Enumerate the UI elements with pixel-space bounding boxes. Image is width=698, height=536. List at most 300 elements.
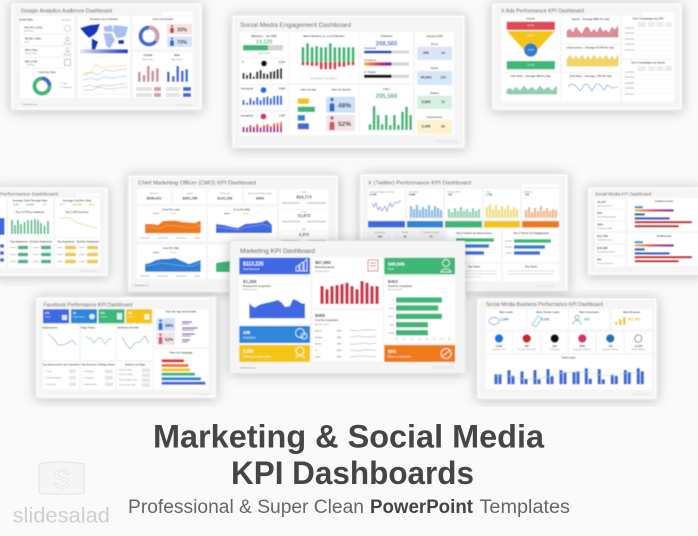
panel: top countries: Top Impressions by Countries [42,362,80,366]
panel: monthly metrics: Conversions [427,115,443,119]
panel: X followers [240,58,288,84]
panel: left KPI list: Total Social Fans [597,204,612,208]
panel: click rate line chart [562,73,620,102]
panel: Facebook followers: Facebook [241,86,254,90]
panel: top campaigns by spend table [622,60,674,102]
panel: average click-through rate chart: 6.7 [43,204,47,206]
panel: new vs lost followers chart: New Followers vs. Lost Followers [303,34,345,38]
dashboard card: Social Media Engagement [232,15,465,148]
panel: page views line chart: Page Views [81,326,96,330]
panel: total revenue tile [239,258,310,274]
panel: left KPI list: 8% [597,258,602,262]
panel: link clicks: Link Clicks [409,192,419,194]
panel: X followers: X [242,60,244,64]
panel: social network tiles: 920 [553,344,557,348]
dashboard card: Chief Marketing Officer (CMO) KPI: Chief Marketing Officer (CMO) KPI Dashboard [138,180,256,186]
panel: webinars: Webinars – Jan 2030 [251,34,277,38]
panel: social network tiles: $580 [579,344,586,348]
panel: cost per acquisition list: Social [315,344,321,346]
panel: KPI tiles: 264 [100,311,105,315]
panel: left KPI list: 848 [597,211,602,215]
panel: cost per acquisition list: $012 [337,330,342,332]
panel: funnel metrics: 2,372 [299,232,310,237]
panel: profit per acquisition bars: By week of year [388,289,403,291]
panel: likes by age and gender [289,85,359,135]
panel: click rate line chart: Click Rate – Average 1.2% Per Day [569,74,612,78]
panel: social network tiles [486,332,652,353]
panel: impressions area chart: Impressions – Average 37,879 Per Day [567,46,615,50]
panel: top tweet notes: Top Tweet [468,264,480,268]
panel: profit per acquisition bars: Social [389,308,395,310]
panel: social network tiles: 139 [608,344,613,348]
panel: fans by age and gender: Fans By Age and Gender [166,310,196,314]
panel: top KPI tiles [486,309,652,329]
panel: actions on page: Get Direction Click [119,384,136,386]
panel: fans by language bars [154,349,208,389]
panel: revenue per acquisition chart: $1,256 [243,279,257,284]
panel: social network tiles: X Followers [549,349,560,351]
panel: profit tile: $45,609 [388,262,405,266]
panel: cost per lead chart: Cost Per Lead [162,208,180,212]
panel: top and bottom segments: Top Segments [10,240,28,244]
panel: KPI tiles: Likes [128,316,134,318]
panel: top KPI tiles: $141,296 [218,196,232,200]
panel: return on investment tile: Return on Investment [388,356,411,358]
panel: cost per acquisition list [312,310,383,361]
panel: actions on page: Post Link Clicks [119,373,133,376]
panel: funnel metrics: MQL [302,229,307,231]
panel: funnel metrics: Leads [301,212,307,214]
panel: likes by age and gender: Likes by Age [300,88,317,92]
panel: top and bottom segments [0,238,100,268]
panel: goals data: 905 (+7%) [25,60,37,64]
panel: likes chart: 295,568 [376,94,398,100]
panel: top KPI tiles: New Revenue [623,310,641,314]
panel: webinars [240,32,288,57]
panel: impression rate: 2.19% [369,192,377,196]
panel: sessions map and line chart: Sessions by Continent [90,17,118,21]
panel: cost per MQL chart: Cost Per MQL [233,208,251,212]
panel: funnel: 67,104 [527,64,535,66]
dashboard card: Facebook Performance KPI: slidesalad [192,391,210,396]
panel: social network tiles: 393 [525,344,529,348]
panel: small KPI tiles: Impressions [375,232,385,234]
panel: KPI tiles: 98 [73,311,76,315]
panel: users by type donut [20,69,74,98]
panel: monthly metrics: 11 [441,100,445,104]
dashboard card: Social Media KPI: Social Media KPI Dashboard [595,191,651,196]
panel: social network tiles: 14,330 [634,344,643,348]
panel: small KPI tiles: Followers Gained [423,232,439,234]
panel: top 3 tweets by engagement [503,229,559,262]
panel: top sources: Top Sources of Page Views [81,362,115,366]
panel: acquisitions tile: 108 [243,330,251,335]
dashboard card: Chief Marketing Officer (CMO) KPI [128,175,338,292]
panel: top sources: 1. Facebook [83,371,94,373]
panel: top KPI tiles: Net Income Per Acquisition [248,192,272,195]
panel: top KPI tiles [137,189,277,204]
panel: cost per acquisition list: Display [315,337,323,339]
panel: link clicks: 5,889 [409,192,416,196]
panel: monthly metrics: 9,565 [422,100,430,104]
panel: link clicks [407,189,443,228]
dashboard card: Google Analytics Audience: 1 SlideSalad.com [22,104,38,106]
panel: retweets [522,189,559,228]
panel: impression rate: Average Engagement Rate [370,190,395,194]
panel: followers: Instagram [364,58,377,62]
panel: KPI tiles: 822 [128,311,133,315]
panel: monthly metrics: Clicks [431,66,439,70]
panel: top KPI tiles: 930 [584,318,590,322]
panel: followers: Facebook [364,46,377,50]
panel: KPI tiles: Page Views [73,316,85,318]
panel: monthly metrics: 9,450 [422,124,430,128]
panel: new vs lost followers chart [289,32,359,83]
panel: return on investment tile: 58% [388,349,397,354]
panel: social network tiles: LinkedIn Followers [602,349,619,351]
panel: top KPI tiles: Revenue [150,193,159,195]
panel: top countries: 3. Germany [45,384,55,386]
panel: cost per acquisition list: $012 [337,350,342,352]
panel: likes: Likes [486,192,491,194]
panel: top KPI tiles: $391,296 [182,196,198,200]
panel: funnel metrics: 21,972 [298,213,311,218]
panel: users by type donut: Users by Type [38,70,56,74]
panel: left KPI list: Frequency Traffic [597,228,612,230]
panel: top sources: 3. Administrator [83,383,97,386]
panel: actions on page: Actions on Page [125,362,146,366]
panel: monthly metrics: 26 [441,124,445,128]
panel: audience growth line chart [117,325,153,360]
dashboard card: X Ads Performance [492,3,682,110]
dashboard card: Google Analytics Audience: Google Analytics Audience Dashboard [21,8,112,14]
panel: top KPI tiles: New Customers [579,310,600,314]
panel: impressions area chart [562,45,620,72]
dashboard card: Performance Dashboard (cropped at left edge) [0,187,108,276]
panel: top KPI tiles: 2,999 [500,318,509,322]
panel: funnel metrics [279,189,328,252]
dashboard thumbnails [0,3,698,399]
logo: slidesalad [12,462,110,528]
panel: top KPI tiles: Sales Ready Leads [536,310,560,314]
panel: followers: 208,565 [376,42,398,48]
panel: actions on page: Number Clicks [119,370,132,372]
panel: average click-through rate chart: 6.4% [13,204,20,206]
subtitle: PowerPoint [370,497,474,518]
panel: Instagram followers: Instagram [241,114,254,118]
panel: KPI tiles: Shares [100,316,108,318]
panel: KPI tiles: Clicks [45,316,52,318]
panel: marketing qualified leads tile [239,345,310,362]
panel: total revenue tile: $113,225 [243,262,264,268]
panel: left KPI list: Social Media Referral [597,216,617,218]
panel: funnel metrics: Leads [301,192,307,194]
dashboard card: X (Twitter) Performance KPI: X (Twitter) Performance KPI Dashboard [368,180,471,186]
panel: actions on page [117,362,153,389]
main title: KPI Dashboards [231,455,474,491]
panel: impressions line chart: Impressions [42,326,58,330]
panel: goals data: Bounce Rate [25,52,38,55]
panel: social network tiles: YouTube Subscribers [517,349,536,351]
panel: fans by age and gender: 52% [165,337,174,342]
panel: monthly metrics: 45,563 [420,76,432,80]
panel: left KPI list: $18,982 [597,246,608,250]
logo: slidesalad: slidesalad [12,504,110,528]
panel: profit per acquisition bars: Tv [392,300,394,302]
panel: top KPI tiles: $57,965 [628,318,640,322]
panel: likes chart [360,85,413,135]
panel: spend chart (cropped) [0,198,6,237]
dashboard card: Marketing KPI (front) [230,241,465,373]
panel: gender bar charts [133,52,193,98]
panel: left KPI list: $12,789 [597,234,608,238]
dashboard card: Chief Marketing Officer (CMO) KPI: 1 SlideSalad.com [133,285,149,287]
panel: top and bottom segments: Bottom Segments [77,240,100,244]
panel: likes by age and gender: 52% [338,121,351,128]
panel: left KPI list: Social Media Spend [597,252,615,254]
panel: hashtag clicks [445,189,482,228]
panel: marketing qualified leads tile: Marketing Qualified Leads [243,356,272,358]
panel: top 3 tweets by impressions [447,229,501,262]
panel: funnel metrics: 924,773 [296,194,312,200]
panel: top KPI tiles: Margin [187,193,193,195]
dashboard card: Google Analytics Audience [11,3,202,110]
panel: top KPI tiles: 5,345 [541,318,550,322]
panel: goals data: Users [24,42,30,44]
panel: social network tiles: Instagram Followers [573,348,591,351]
panel: top KPI tiles: New Leads [499,310,513,314]
panel: average click-through rate chart: Average Click-Through Rate [13,198,48,202]
subtitle [128,497,570,518]
logo: slidesalad: S [53,464,70,494]
panel: cost per acquisition list: Search [315,330,322,332]
panel: profit per acquisition bars [384,277,455,343]
panel: users by gender: 30% [177,28,188,34]
dashboard card: Marketing KPI (front): slidesalad [432,365,454,371]
panel: new vs lost followers chart: New Followers Lost Followers [311,77,337,80]
panel: small KPI tiles: 39 [404,234,407,238]
panel: top KPI tiles: Net Income [220,192,231,195]
panel: goals data: 805 (+4%) [25,48,37,52]
panel: revenue per acquisition chart: By week of year [243,289,258,291]
main title: Marketing & Social Media [153,418,544,454]
panel: funnel [502,16,560,72]
panel: social network tiles: Facebook Likes [492,349,506,351]
panel: small KPI tiles [368,230,444,239]
panel: top KPI tiles: $403 [256,196,264,200]
panel: actions on page: Phone Number Click [119,380,137,382]
dashboard card: Social Media Business Performance KPI: Social Media Business Performance KPI Dashboard [486,302,603,308]
dashboard card: Social Media Engagement: slidesalad [436,139,458,145]
panel: KPI tiles [43,309,152,323]
panel: users by gender [133,16,193,49]
subtitle: Templates [480,497,570,518]
panel: top tweet notes: Top Tweet [525,264,537,268]
panel: hashtag clicks: Hashtag Clicks [447,190,460,194]
panel: total leads bar chart [486,355,652,389]
panel: followers: Followers [380,34,393,38]
dashboard card: Google Analytics Audience: slidesalad [175,102,193,107]
panel: likes: 1,793 [486,192,493,196]
panel: users by type donut: New [63,83,68,85]
panel: audience growth line chart: Audience Growth [117,326,139,330]
panel: fans by age and gender: 48% [165,323,174,328]
panel: top campaigns by CPA table: Top 5 Campaigns by CPA [632,16,664,20]
panel: top countries: 1. India [45,371,52,373]
panel: acquisitions tile: Acquisitions [243,336,257,340]
panel: average cost per click chart: $10.000 [72,202,82,206]
panel: spend area chart [562,16,620,43]
panel: top 3 tweets by impressions: Top 3 Tweets by Impressions [456,231,492,235]
panel: average click-through rate chart: Top 5 CTR by Audience [16,210,45,214]
panel: gender bar charts: Female [144,53,153,57]
panel: cost per acquisition list: $068 [315,313,325,318]
panel: goals data: 746,770 (+11%) [24,26,42,30]
main title [153,418,544,491]
panel: cost per acquisition list: Cost Per Acquisition [315,319,339,322]
panel: gender bar charts: Male [174,53,180,57]
panel: left KPI list: % Social Revenue [597,263,614,265]
dashboard card: Performance Dashboard (cropped at left edge): slidesalad [80,268,98,273]
dashboard card: Facebook Performance KPI [36,297,216,398]
panel: small KPI tiles: Tweets [402,231,408,234]
panel: likes by age and gender: 48% [338,102,351,110]
panel: top and bottom segments: Bottom Segments [30,240,53,244]
panel: Instagram followers [240,112,288,136]
panel: cost per acquisition list: $016 [337,337,342,339]
panel: average cost per click chart: $1.0 [59,202,65,206]
panel: ad revenue bars: Ad Revenue [656,234,672,238]
panel: left KPI list: Total Ad Revenue [597,238,614,242]
panel: top sources: 2. Instagram [83,376,94,380]
panel: X followers: 9,225 [279,60,286,64]
panel: total leads bar chart: Total Leads [561,356,576,360]
panel: top countries: 2. United Kingdom [45,376,62,380]
panel: goals data: 85,501 (+9%) [25,36,41,40]
panel: webinars: 13,125 [256,40,272,46]
panel: users by type donut: Returning [63,86,72,89]
panel: cost per SQL chart: Cost Per SQL [163,246,180,250]
panel: goals data: Goals Data [19,18,33,22]
panel: profit per acquisition bars: Search [388,316,394,318]
panel: monthly metrics: 14 [441,51,445,55]
panel: left KPI list [595,199,625,266]
panel: Facebook followers: 5,094 [279,86,286,90]
panel: acquisitions tile [239,326,310,343]
panel: monthly metrics: Shares [430,91,439,95]
subtitle: Professional & Super Clean [128,497,364,518]
panel: top sources [81,362,115,389]
panel: impressions line chart [42,325,79,360]
panel: social network tiles: Brand Loyalists [631,348,645,351]
panel: revenue per acquisition chart [239,277,310,324]
panel: link clicks area chart [502,73,560,102]
dashboard card: Social Media Engagement: Social Media Engagement Dashboard [240,22,351,29]
panel: cost per acquisition list: Video [315,356,321,358]
panel: top campaigns by spend table: Top 5 Campaigns by Spend [631,60,665,64]
panel: marketing spend chart [312,258,383,308]
panel: gender bar charts: Age Groups [143,58,153,61]
panel: monthly metrics: 116 [440,76,446,80]
panel: cost per SQL chart [137,245,206,279]
panel: left KPI list: 16,437 [597,200,607,204]
panel: marketing spend chart: Marketing Spend [315,266,335,269]
panel: average click-through rate chart [8,198,53,237]
panel: likes chart: Likes [383,87,390,91]
panel: average cost per click chart: $1.0 [89,202,95,206]
panel: users by gender: 70% [177,40,188,46]
panel: monthly metrics [415,32,454,135]
panel: monthly metrics: January 2030 [426,34,443,38]
dashboard card: X (Twitter) Performance KPI [360,174,568,291]
panel: profit tile: Profit [388,268,394,271]
panel: social network tiles: 8,383 [496,344,503,348]
panel: top KPI tiles: $346,631 [146,196,162,200]
panel: profit tile [384,258,455,274]
panel: average cost per click chart: Top 5 CPC by Hour [65,210,89,214]
panel: left KPI list: 18% [597,222,603,226]
panel: retweets: 158 [525,192,530,196]
panel: hashtag clicks: 180 [448,192,453,196]
panel: marketing qualified leads tile: 2,283 [243,348,254,354]
panel: top campaigns by CPA table [622,16,674,58]
dashboard card: Marketing KPI (front): 1 SlideSalad.com [240,368,256,370]
panel: funnel: 62,796 [527,25,535,27]
panel: top and bottom segments: Top Segments [57,240,75,244]
panel: marketing spend chart: $67,860 [315,260,331,265]
dashboard card: X Ads Performance: X Ads Performance KPI Dashboard [501,8,584,14]
panel: top 3 tweets by engagement: Top 3 Tweets by Engagement [513,231,549,235]
dashboard card: X (Twitter) Performance KPI: slidesalad [536,283,554,288]
panel: audience size bars: Audience Fans [655,199,674,203]
panel: webinars: Target: 20,000 [258,52,271,55]
panel: total revenue tile: Total Revenue [243,267,260,271]
dashboard card: Social Media KPI [588,187,698,275]
panel: small KPI tiles: 79 [430,234,433,238]
panel: impression rate [368,189,405,228]
panel: goals data: Last Month [61,18,71,22]
panel: monthly metrics: Posts [431,42,439,46]
panel: page views line chart [81,325,115,360]
panel: top tweet notes [447,264,559,281]
panel: average cost per click chart: Average Cost Per Click [63,198,92,202]
panel: funnel: 60,020 [527,35,535,37]
panel: fans by language bars: Fans by Language [170,350,193,354]
panel: cost per MQL chart [208,207,277,241]
panel: link clicks area chart: Link Click – Average 488 Per Day [510,74,551,78]
panel: cost per acquisition list: $016 [337,344,342,346]
panel: cost per acquisition list: Tv [315,350,318,352]
panel: goals data [19,16,74,68]
panel: revenue per acquisition chart: Revenue Per Acquisition [243,285,272,288]
panel: goals data: Duration [27,64,35,66]
panel: spend area chart: Spend – Average $869 Per Day [572,17,610,21]
dashboard card: Facebook Performance KPI: Facebook Performance KPI Dashboard [44,302,133,308]
panel: fans by age and gender [154,309,208,347]
panel: users by gender: Users by Gender [153,17,173,21]
panel: sessions map and line chart [78,16,130,98]
panel: small KPI tiles: 998 [378,234,383,238]
panel: profit per acquisition bars: Video [389,324,395,326]
panel: Instagram followers: 1,364 [279,114,286,118]
panel: funnel: Funnel [526,16,535,20]
panel: funnel: 3.00% [528,50,534,52]
dashboard card: Social Media Business Performance KPI [477,298,657,399]
panel: average cost per click chart [55,198,100,237]
panel: likes [484,189,520,228]
panel: cost per acquisition chart [208,245,230,279]
panel: profit per acquisition bars: Profit Per Acquisition [388,285,413,288]
